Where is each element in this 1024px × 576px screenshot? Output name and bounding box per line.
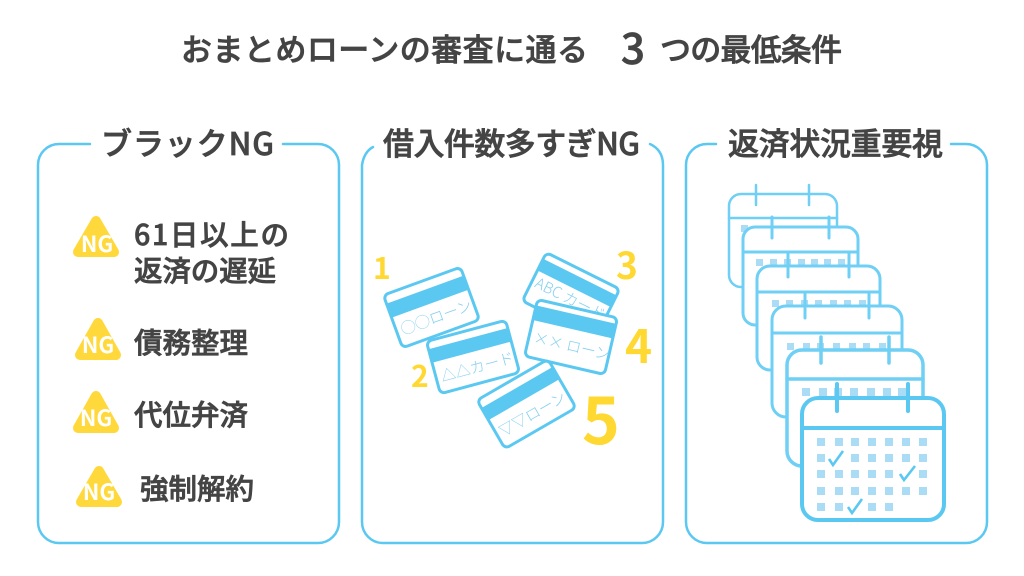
card 2 [426, 320, 520, 394]
card 4 [525, 300, 618, 375]
text: 61 days delay: 61日以上の [134, 213, 289, 254]
card 3 [522, 253, 620, 337]
panel: repayment status [686, 119, 987, 543]
panel border [38, 144, 339, 543]
number 1: 1 [373, 244, 391, 288]
title [181, 16, 842, 77]
calendar 6 front with checks [802, 384, 944, 520]
heading: ブラックNG [101, 119, 274, 164]
panel border [686, 144, 987, 543]
number 3: 3 [616, 236, 638, 290]
text: subrogation: 代位弁済 [134, 393, 248, 434]
panel: too many loans NG [362, 119, 663, 543]
card 5 [477, 359, 576, 449]
card 1 [383, 267, 480, 348]
calendar 1 [729, 185, 837, 287]
calendar 3 [757, 254, 880, 370]
icon: NG badge 2: NG [82, 328, 114, 360]
card 4: ×× ローン [532, 327, 612, 365]
calendar 2 [743, 217, 858, 325]
title: つの最低条件 [660, 25, 842, 70]
title: 3 [621, 16, 645, 77]
number 5: 5 [582, 371, 620, 463]
calendar 5 [787, 337, 923, 466]
icon: NG badge 1: NG [81, 227, 113, 259]
card 1: ◯◯ローン [398, 294, 475, 340]
panel border [362, 144, 663, 543]
card 3: ABC カード [532, 272, 609, 325]
calendar stack [729, 185, 944, 520]
text: delay line 2: 返済の遅延 [134, 249, 276, 290]
card 5: ▽▽ローン [495, 386, 570, 442]
card 2: △△カード [438, 347, 516, 387]
text: forced cancellation: 強制解約 [140, 467, 254, 508]
icon: NG badge 4: NG [83, 475, 115, 507]
title: おまとめローンの審査に通る [181, 25, 588, 70]
heading: 借入件数多すぎNG [383, 119, 640, 164]
panel: black list NG [38, 119, 339, 543]
number 4: 4 [625, 311, 652, 377]
text: debt arrangement: 債務整理 [134, 321, 248, 362]
heading: 返済状況重要視 [728, 119, 943, 164]
number 2: 2 [411, 352, 429, 396]
icon: NG badge 3: NG [80, 401, 112, 433]
calendar 4 [772, 294, 902, 417]
